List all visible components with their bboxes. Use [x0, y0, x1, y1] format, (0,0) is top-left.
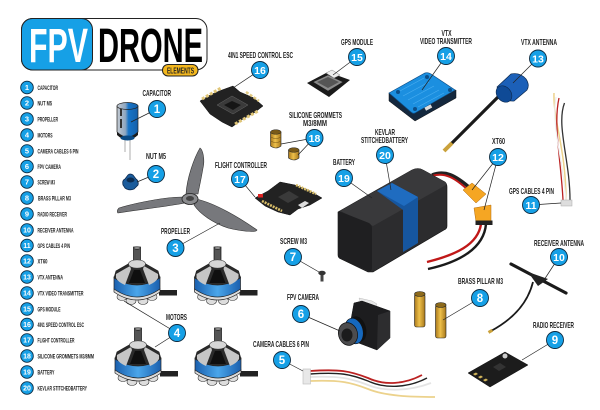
part 14: VTX video transmitter: VIDEO TRANSMITTER [420, 36, 472, 46]
legend: numbered list of parts: 4IN1 SPEED CONTROL ESC [38, 322, 84, 329]
part 4: motors: MOTORS [166, 312, 187, 322]
part 20: Kevlar stitched battery strap [361, 127, 408, 190]
part 6: FPV camera: FPV CAMERA [287, 292, 319, 302]
part 8: brass pillar M3: BRASS PILLAR M3 [458, 276, 503, 286]
part 14: VTX video transmitter: VTX [442, 28, 452, 38]
part 20: Kevlar stitched battery strap: KEVLAR [375, 127, 395, 137]
legend: numbered list of parts: PROPELLER [38, 116, 58, 124]
legend: numbered list of parts: GPS MODULE [38, 306, 61, 314]
title: FPV Drone Elements [22, 18, 207, 76]
legend: numbered list of parts: 7 [25, 178, 29, 187]
part 3: propeller [117, 148, 257, 256]
legend: numbered list of parts: XT60 [38, 258, 48, 266]
title: FPV Drone Elements: DRONE [98, 20, 203, 73]
part 14: VTX video transmitter [389, 28, 472, 121]
legend: numbered list of parts: CAMERA CABLES 6 PIN [38, 148, 79, 156]
legend: numbered list of parts: 17 [23, 338, 31, 345]
legend: numbered list of parts: SILICONE GROMMETS M3/8MM [38, 354, 94, 360]
legend: numbered list of parts [21, 81, 94, 394]
legend: numbered list of parts: 11 [23, 243, 31, 250]
legend: numbered list of parts: 9 [25, 210, 29, 219]
part 12: XT60 connectors and wires: 12 [492, 152, 504, 164]
legend: numbered list of parts: CAPACITOR [38, 85, 58, 92]
part 8: brass pillar M3: 8 [477, 293, 484, 305]
legend: numbered list of parts: 1 [25, 83, 29, 92]
part 15: GPS module [307, 37, 373, 97]
part 17: flight controller: 17 [234, 174, 246, 186]
part 19: battery: BATTERY [333, 157, 355, 167]
legend: numbered list of parts: KEVLAR STITCHEDBATTERY [38, 386, 87, 392]
part 7: screw M3: SCREW M3 [280, 236, 307, 246]
part 7: screw M3 [280, 236, 326, 282]
part 18: silicone grommets: SILICONE GROMMETS [289, 110, 342, 120]
part 1: capacitor: 1 [154, 104, 161, 116]
part 9: radio receiver: 9 [552, 335, 558, 347]
legend: numbered list of parts: BRASS PILLAR M3 [38, 196, 71, 202]
part 17: flight controller: FLIGHT CONTROLLER [215, 160, 267, 170]
legend: numbered list of parts: 3 [25, 115, 29, 124]
legend: numbered list of parts: 19 [23, 370, 31, 377]
part 6: FPV camera [287, 292, 390, 350]
legend: numbered list of parts: 20 [23, 386, 31, 393]
part 5: camera cables 6 pin [253, 339, 435, 397]
part 3: propeller: PROPELLER [161, 226, 190, 236]
part 1: capacitor: CAPACITOR [142, 88, 171, 98]
part 20: Kevlar stitched battery strap: 20 [379, 150, 391, 162]
legend: numbered list of parts: FLIGHT CONTROLLER [38, 338, 75, 344]
part 16: 4-in-1 speed control ESC: 4IN1 SPEED CONTROL ESC [228, 50, 293, 60]
part 19: battery [333, 157, 447, 272]
legend: numbered list of parts: 18 [23, 354, 31, 361]
part 4: motors [114, 247, 258, 386]
legend: numbered list of parts: RADIO RECEIVER [38, 212, 67, 218]
part 17: flight controller [215, 160, 322, 215]
title: FPV Drone Elements: FPV [29, 20, 88, 73]
legend: numbered list of parts: VTX ANTENNA [38, 274, 63, 282]
part 5: camera cables 6 pin: 5 [279, 355, 286, 367]
part 2: nut M5: NUT M5 [146, 151, 166, 161]
part 20: Kevlar stitched battery strap: STITCHEDBATTERY [361, 135, 408, 145]
part 11: GPS cables 4 pin [509, 93, 572, 214]
legend: numbered list of parts: 6 [25, 162, 29, 171]
legend: numbered list of parts: 12 [23, 259, 31, 266]
title: FPV Drone Elements: ELEMENTS [167, 66, 194, 75]
part 15: GPS module: GPS MODULE [341, 37, 373, 47]
legend: numbered list of parts: BATTERY [38, 370, 55, 376]
part 7: screw M3: 7 [290, 252, 296, 264]
legend: numbered list of parts: 16 [23, 322, 31, 329]
part 12: XT60 connectors and wires [427, 136, 506, 269]
legend: numbered list of parts: 15 [23, 307, 31, 314]
part 16: 4-in-1 speed control ESC: 16 [254, 65, 266, 77]
legend: numbered list of parts: 10 [23, 228, 31, 235]
legend: numbered list of parts: 5 [25, 147, 29, 156]
part 14: VTX video transmitter: 14 [440, 51, 452, 63]
legend: numbered list of parts: SCREW M3 [38, 180, 55, 186]
part 8: brass pillar M3 [414, 276, 503, 338]
legend: numbered list of parts: 2 [25, 99, 29, 108]
legend: numbered list of parts: 4 [25, 131, 30, 140]
part 13: VTX antenna [444, 37, 557, 151]
part 13: VTX antenna: 13 [532, 54, 544, 66]
legend: numbered list of parts: RECEIVER ANTENNA [38, 228, 74, 234]
part 19: battery: 19 [338, 173, 350, 185]
part 16: 4-in-1 speed control ESC [200, 50, 293, 127]
part 11: GPS cables 4 pin: 11 [525, 200, 537, 212]
part 6: FPV camera: 6 [298, 309, 304, 321]
legend: numbered list of parts: MOTORS [38, 132, 53, 140]
part 15: GPS module: 15 [351, 52, 363, 64]
part 13: VTX antenna: VTX ANTENNA [521, 37, 557, 47]
legend: numbered list of parts: NUT M5 [38, 100, 52, 108]
part 10: receiver antenna [488, 238, 584, 334]
legend: numbered list of parts: 8 [25, 194, 29, 203]
legend: numbered list of parts: 14 [23, 291, 31, 298]
part 10: receiver antenna: 10 [553, 252, 565, 264]
part 5: camera cables 6 pin: CAMERA CABLES 6 PIN [253, 339, 309, 349]
part 2: nut M5 [123, 151, 166, 190]
legend: numbered list of parts: FPV CAMERA [38, 164, 61, 171]
legend: numbered list of parts: VTX VIDEO TRANSMITTER [38, 290, 84, 298]
part 18: silicone grommets [270, 110, 342, 160]
part 4: motors: 4 [174, 328, 181, 340]
part 18: silicone grommets: 18 [309, 133, 320, 145]
part 18: silicone grommets: M3/8MM [303, 118, 327, 128]
part 2: nut M5: 2 [153, 169, 159, 181]
part 1: capacitor [117, 88, 171, 160]
part 11: GPS cables 4 pin: GPS CABLES 4 PIN [509, 186, 554, 196]
part 3: propeller: 3 [172, 243, 179, 255]
part 12: XT60 connectors and wires: XT60 [492, 136, 505, 146]
legend: numbered list of parts: 13 [23, 275, 31, 282]
legend: numbered list of parts: GPS CABLES 4 PIN [38, 243, 70, 250]
part 9: radio receiver [468, 320, 574, 387]
